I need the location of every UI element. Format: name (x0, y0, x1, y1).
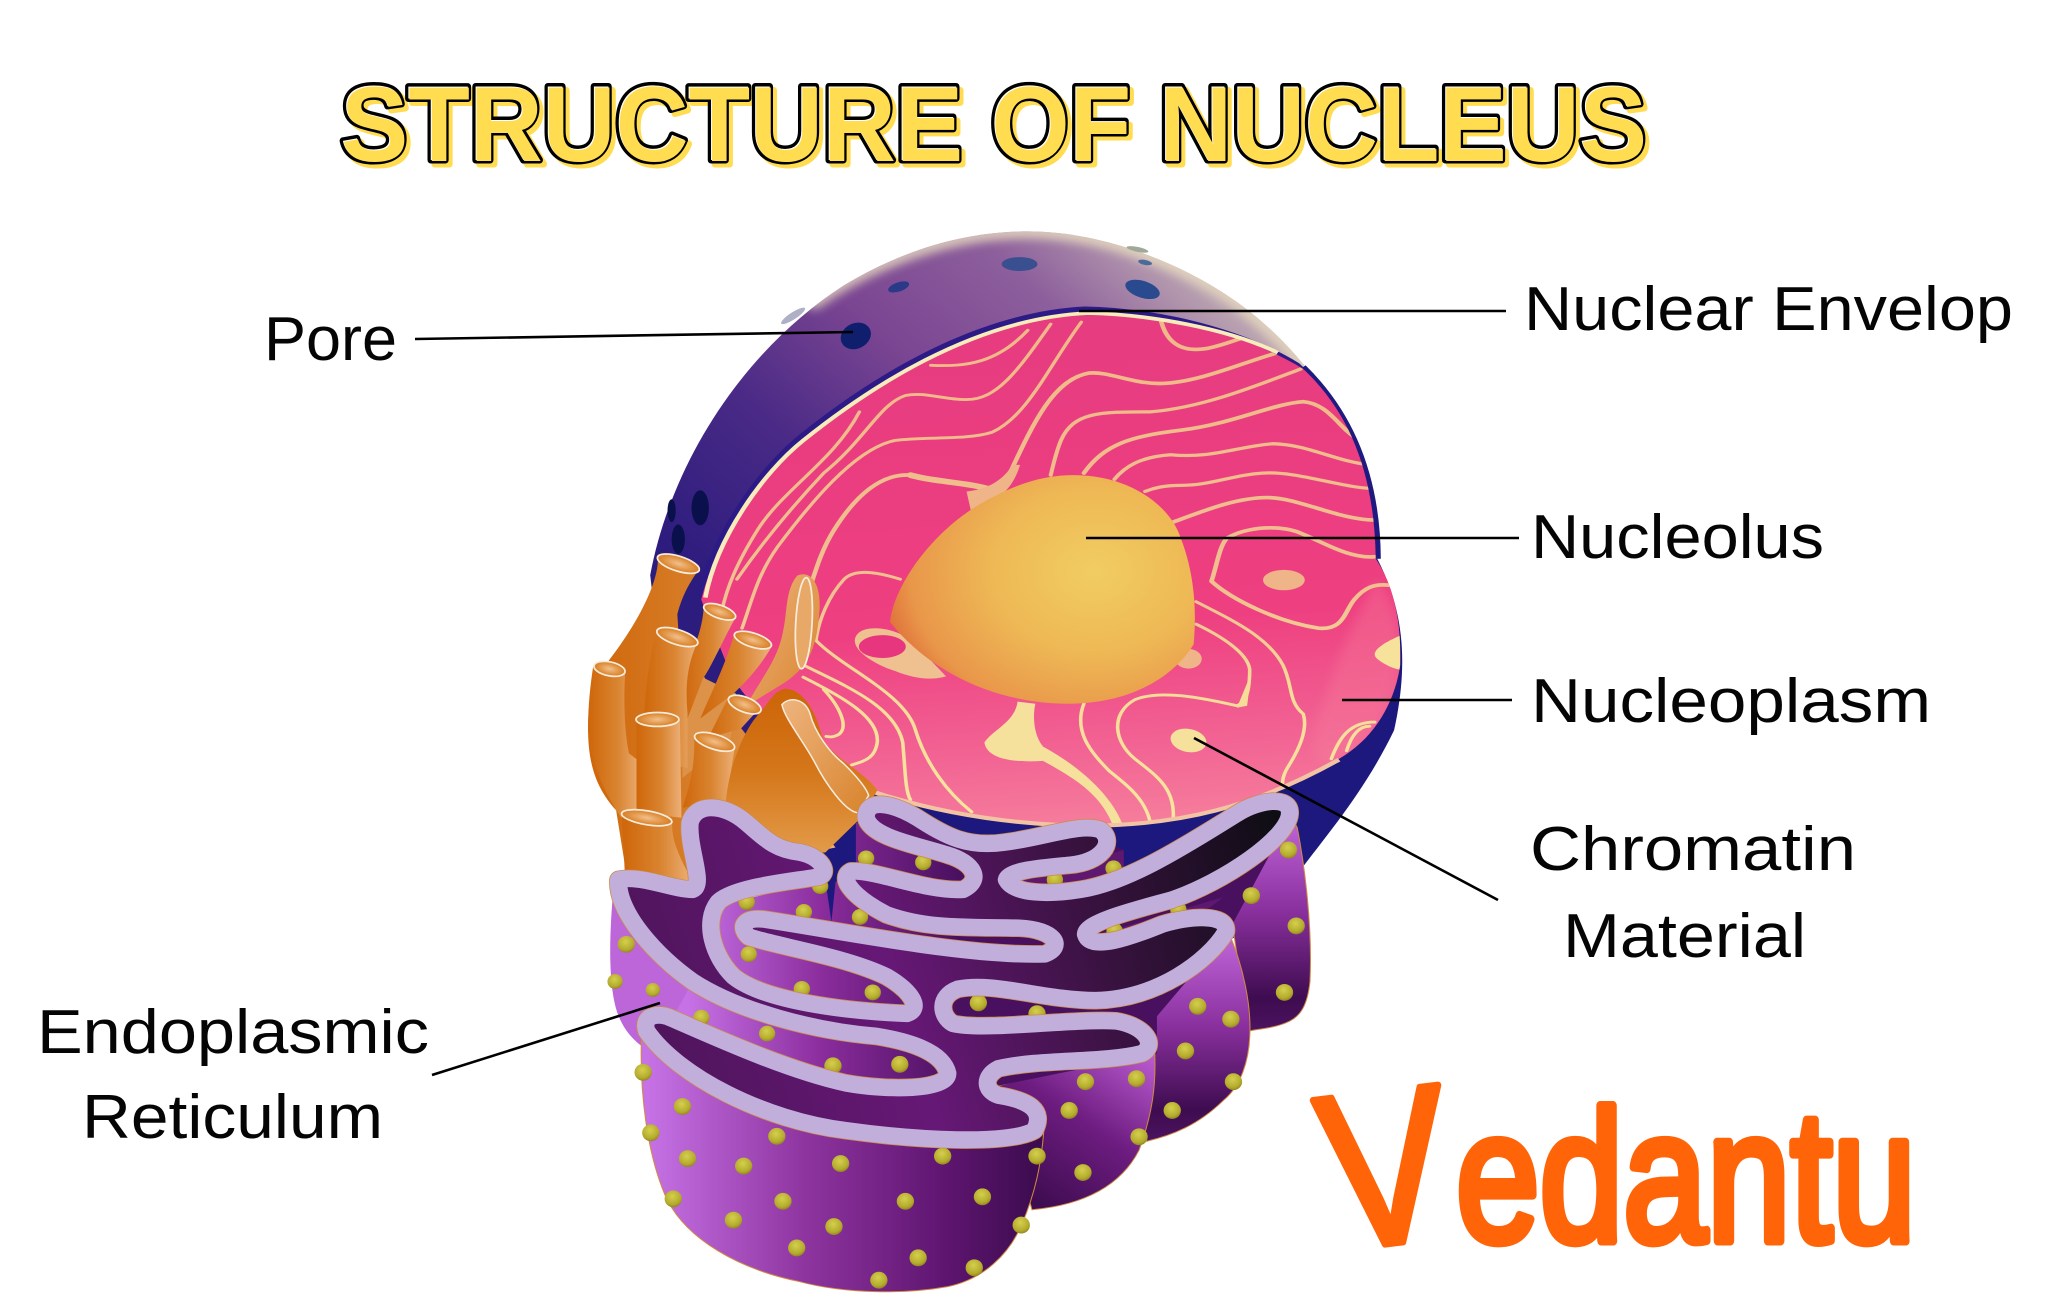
leader line: chromatin material (1194, 738, 1498, 900)
leader line: pore (415, 332, 853, 339)
disc peach lower rim (875, 760, 1339, 826)
tube (708, 698, 762, 738)
label: pore: Pore (264, 305, 397, 374)
leader line: nucleoplasm (1342, 699, 1512, 701)
tube (622, 817, 692, 885)
label: nuclear envelop: Nuclear Envelop (1524, 275, 2013, 344)
ER interior walls (672, 818, 1290, 1086)
leader line: nuclear envelope (1079, 310, 1506, 312)
central filler between tubes (682, 644, 736, 778)
ER rear wall shading (1009, 850, 1223, 957)
tube (700, 633, 772, 718)
dome highlight edge (808, 231, 1313, 379)
logo: Vedantu (1306, 1038, 1916, 1297)
lighter nucleoplasm bulge (1319, 587, 1400, 759)
title: STRUCTURE OF NUCLEUS (340, 63, 1646, 183)
ER sheet: rear right (1121, 813, 1310, 1031)
label: chromatin material: Chromatin (1530, 815, 1856, 884)
ER sheet: front (641, 1031, 1045, 1292)
label: nucleolus: Nucleolus (1531, 503, 1824, 572)
curved tube (746, 574, 820, 706)
chromatin thick junctions (855, 465, 1400, 823)
front lobe (726, 689, 877, 852)
ER sheet: far left (610, 887, 713, 1046)
envelope cream rim (705, 313, 1278, 598)
ER sheet: inner front (999, 1046, 1155, 1210)
label: chromatin material: Material (1563, 902, 1806, 971)
title: STRUCTURE OF NUCLEUS (341, 64, 1647, 184)
tube (644, 632, 698, 768)
ribosomes (607, 842, 1305, 1289)
ER sheet: middle right (1121, 932, 1250, 1141)
logo: Vedantu: V (1306, 1038, 1463, 1297)
tube openings (593, 550, 814, 829)
nucleoplasm disc (701, 312, 1400, 825)
tube (588, 666, 642, 818)
tube (682, 605, 736, 718)
logo: Vedantu: edantu (1456, 1072, 1916, 1281)
nucleolus (890, 475, 1195, 704)
ER membrane ribbon (619, 802, 1290, 1140)
front lobe flat tube (782, 700, 869, 813)
lower envelope crescent (793, 559, 1402, 938)
label: endoplasmic reticulum: Endoplasmic (37, 998, 429, 1067)
endoplasmic reticulum (607, 802, 1310, 1292)
label: endoplasmic reticulum: Reticulum (82, 1083, 383, 1152)
tube (682, 733, 735, 808)
leader line: endoplasmic reticulum (432, 1003, 660, 1075)
chromatin threads (722, 318, 1400, 823)
leader line: nucleolus (1086, 537, 1519, 539)
orange tubular cluster (588, 550, 877, 885)
title: STRUCTURE OF NUCLEUS (344, 67, 1650, 187)
label: chromatin material (1530, 815, 1856, 971)
disc navy rim (697, 307, 1372, 745)
label: nucleoplasm: Nucleoplasm (1531, 667, 1931, 736)
nucleus (650, 231, 1402, 938)
nuclear envelope dome (650, 231, 1377, 832)
back-left mass (588, 559, 836, 877)
pores (668, 245, 1164, 554)
tube (637, 719, 681, 818)
label: endoplasmic reticulum (37, 998, 429, 1152)
